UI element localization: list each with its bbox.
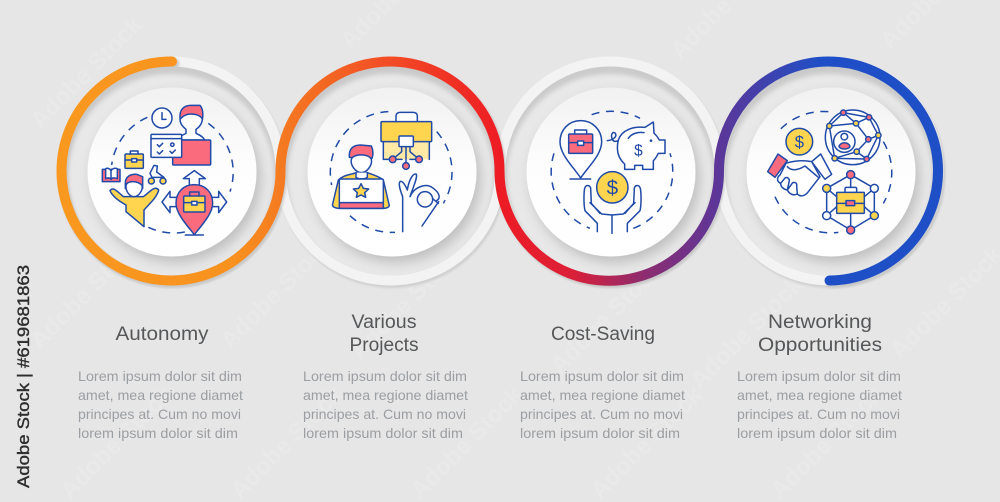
watermark: Adobe Stock (765, 381, 888, 502)
ring tracks and grooves (56, 56, 946, 288)
text block: networking opportunities: Lorem ipsum dolor sit dim (737, 368, 901, 384)
icon: various projects (330, 112, 452, 232)
white disks (88, 88, 916, 256)
icon: autonomy (102, 105, 233, 235)
icon: cost saving: $ (634, 143, 643, 160)
heading: networking opportunities (758, 312, 882, 356)
watermark: Adobe Stock (345, 241, 468, 364)
watermark: Adobe Stock (215, 231, 338, 354)
watermark: Adobe Stock (25, 231, 148, 354)
text block: cost-saving: amet, mea regione diamet (520, 387, 685, 403)
text block: cost-saving (520, 368, 685, 441)
stock credit: Adobe Stock | #619681863 (14, 265, 33, 488)
icon: networking (768, 110, 892, 234)
watermark: Adobe Stock (405, 381, 528, 502)
text block: cost-saving: lorem ipsum dolor sit dim (520, 425, 680, 441)
text block: networking opportunities (737, 368, 902, 441)
text block: various projects: lorem ipsum dolor sit dim (303, 425, 463, 441)
text block: various projects (303, 368, 468, 441)
text block: autonomy: Lorem ipsum dolor sit dim (78, 368, 242, 384)
text block: networking opportunities: amet, mea regione diamet (737, 387, 902, 403)
icon: cost saving: $ (607, 177, 619, 200)
text block: autonomy: amet, mea regione diamet (78, 387, 243, 403)
text block: various projects: Lorem ipsum dolor sit dim (303, 368, 467, 384)
text block: autonomy: principes at. Cum no movi (78, 406, 241, 422)
watermark: Adobe Stock (585, 381, 708, 502)
text block: various projects: principes at. Cum no movi (303, 406, 466, 422)
heading: networking opportunities: Opportunities (758, 335, 882, 356)
text block: cost-saving: principes at. Cum no movi (520, 406, 683, 422)
icon: cost saving (551, 111, 673, 233)
heading: various projects: Various (352, 312, 416, 333)
heading: various projects (350, 312, 418, 356)
text block: various projects: amet, mea regione diamet (303, 387, 468, 403)
watermark: Adobe Stock (25, 11, 148, 134)
text block: networking opportunities: lorem ipsum dolor sit dim (737, 425, 897, 441)
watermark: Adobe Stock (685, 271, 808, 394)
watermark: Adobe Stock (225, 381, 348, 502)
ribbon shadow (63, 63, 939, 283)
watermark: Adobe Stock (545, 256, 668, 379)
text block: networking opportunities: principes at. Cum no movi (737, 406, 900, 422)
watermark: Adobe Stock (55, 381, 178, 502)
gradient ribbon (61, 61, 938, 281)
heading: various projects: Projects (350, 335, 418, 356)
icon: networking: $ (795, 133, 804, 152)
text block: autonomy (78, 368, 243, 441)
heading: cost-saving: Cost-Saving (551, 324, 655, 345)
text block: autonomy: lorem ipsum dolor sit dim (78, 425, 238, 441)
text block: cost-saving: Lorem ipsum dolor sit dim (520, 368, 684, 384)
heading: networking opportunities: Networking (768, 312, 872, 333)
heading: autonomy: Autonomy (116, 324, 209, 345)
